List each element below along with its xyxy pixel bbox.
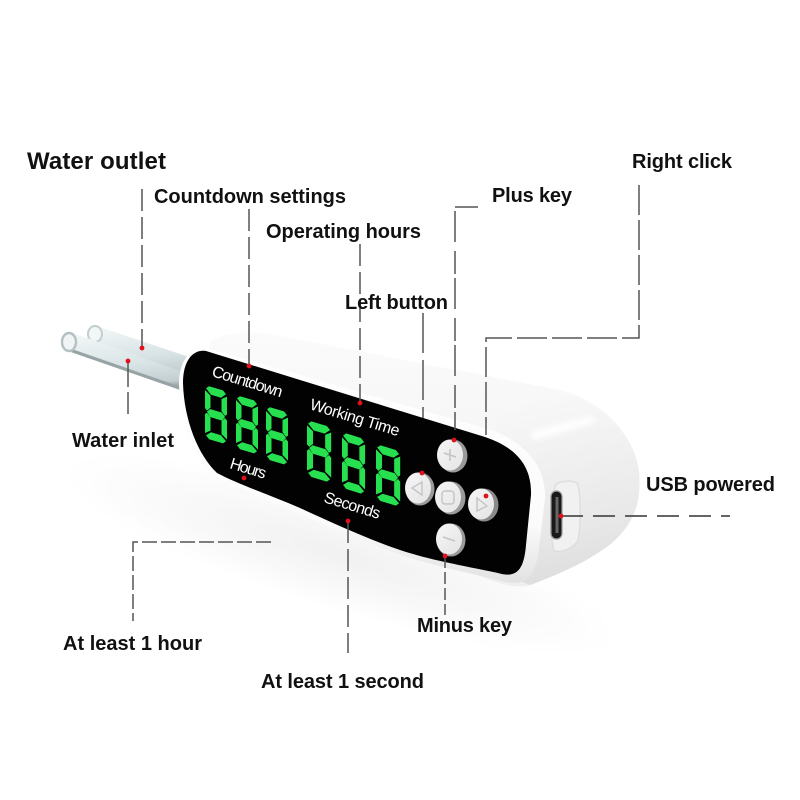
label: usb powered: USB powered — [646, 474, 775, 496]
leader: minus key — [443, 554, 447, 615]
white bezel — [179, 347, 545, 583]
label: left button: Left button — [345, 292, 448, 314]
label: at least 1 second: At least 1 second — [261, 671, 424, 693]
leader: left button — [420, 313, 424, 475]
body top and side shell — [200, 332, 640, 587]
leader: operating hours — [358, 244, 362, 405]
front tube: water inlet — [62, 333, 186, 391]
control buttons — [405, 440, 498, 556]
working time digits — [307, 420, 400, 507]
hours marker dot — [242, 476, 246, 480]
leader: water outlet — [140, 189, 144, 350]
label: minus key: Minus key — [417, 615, 513, 637]
leader: countdown settings — [247, 209, 251, 368]
hours label on display: Hours — [228, 456, 268, 483]
minus button — [436, 524, 466, 556]
seconds label on display: Seconds — [322, 490, 382, 523]
left button — [405, 472, 434, 506]
highlight on shell — [530, 416, 596, 440]
water tubes — [62, 326, 192, 391]
label: operating hours: Operating hours — [266, 221, 421, 243]
leader: usb powered — [559, 514, 730, 518]
countdown digits — [205, 385, 288, 466]
leader: right click — [484, 185, 639, 498]
label: plus key: Plus key — [492, 185, 573, 207]
device body — [179, 332, 640, 587]
plus button — [437, 440, 468, 472]
rear tube: water outlet — [88, 326, 192, 380]
label: water inlet: Water inlet — [72, 430, 174, 452]
center button — [435, 482, 466, 514]
leader: plus key — [452, 207, 478, 442]
leader: water inlet — [126, 359, 130, 414]
working time label on display: Working Time — [308, 397, 402, 440]
leader: at least 1 second — [346, 519, 350, 653]
countdown label on display: Countdown — [210, 364, 285, 401]
ground shadow — [47, 418, 633, 692]
black display face — [183, 351, 531, 575]
label: at least 1 hour: At least 1 hour — [63, 633, 202, 655]
usb-c port — [551, 481, 580, 551]
right button — [468, 488, 498, 522]
label: water outlet: Water outlet — [27, 148, 166, 175]
label: countdown settings: Countdown settings — [154, 186, 346, 208]
label: right click: Right click — [632, 151, 733, 173]
leader: at least 1 hour — [133, 542, 271, 621]
